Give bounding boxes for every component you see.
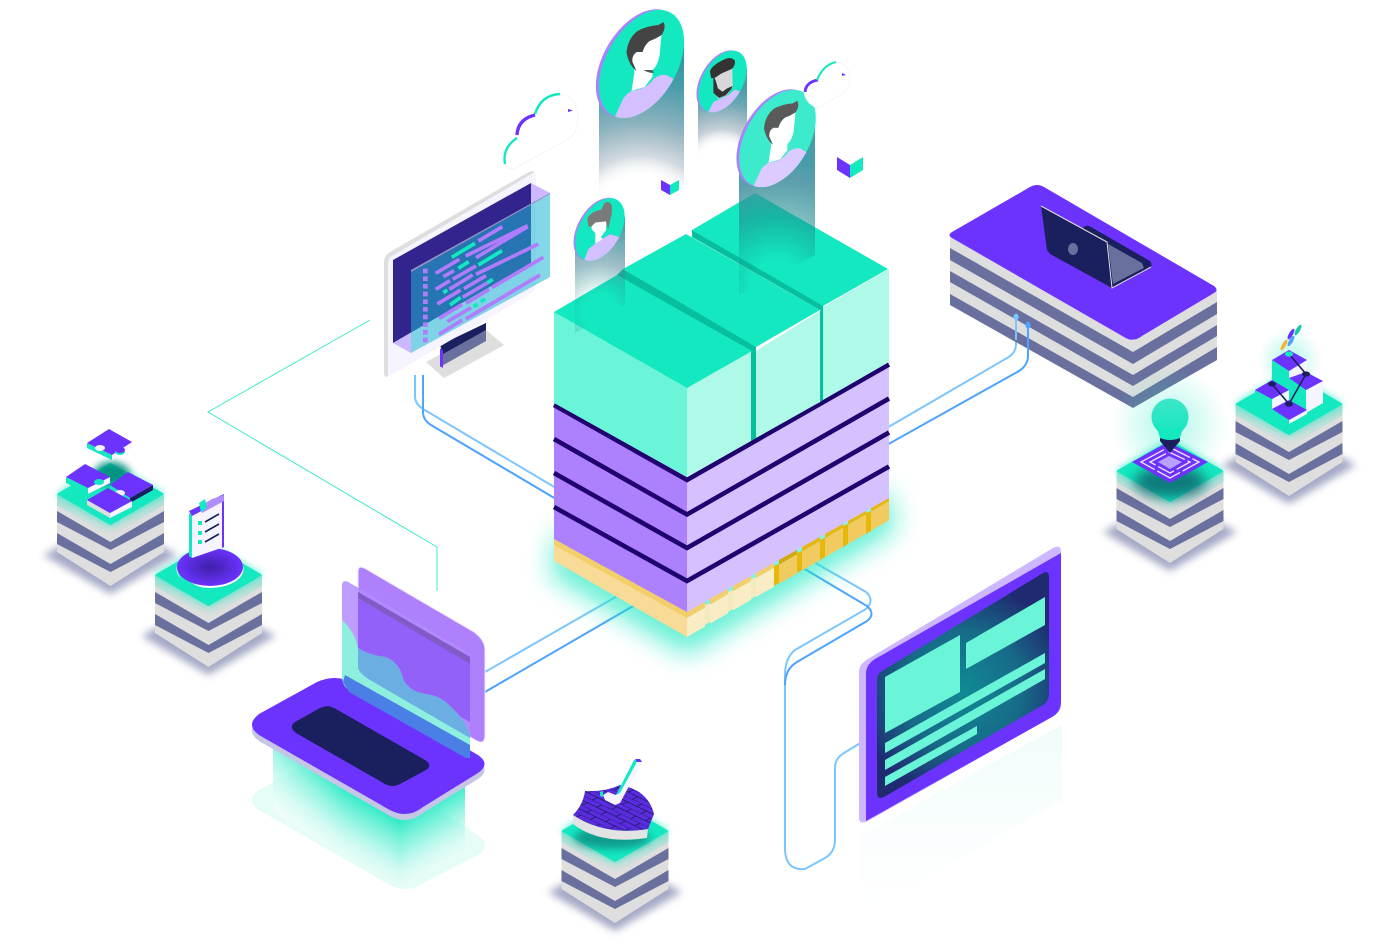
front piece xyxy=(87,488,132,518)
small cube right xyxy=(837,157,863,178)
coloured leaves xyxy=(1279,324,1303,351)
light bulb xyxy=(1152,398,1188,453)
teal light column xyxy=(273,735,465,885)
laptop bottom left xyxy=(252,567,485,889)
thin teal connector line xyxy=(208,320,437,591)
storage platform top right xyxy=(950,185,1217,408)
bulb glow xyxy=(1112,367,1228,483)
front translucent panel xyxy=(342,581,470,758)
tablet content blocks xyxy=(885,597,1045,786)
yellow pallet blocks xyxy=(687,495,889,637)
left piece xyxy=(66,464,110,494)
blue cable: central block to tablet xyxy=(785,561,872,869)
laptop floor shadow xyxy=(252,745,485,889)
connector fragments xyxy=(410,708,438,725)
keyboard rim xyxy=(252,684,484,820)
blue cable: central block to laptop xyxy=(485,583,640,692)
person beam 3 xyxy=(739,118,815,295)
monitor xyxy=(384,171,550,378)
monitor frame edge xyxy=(384,171,535,377)
central glow beneath block xyxy=(550,490,895,655)
monitor screen xyxy=(393,183,531,343)
clipboard xyxy=(189,494,224,558)
cube stairs xyxy=(1255,350,1323,424)
tablet body xyxy=(866,553,1061,821)
cable plugs xyxy=(1013,314,1031,352)
cloud left xyxy=(504,94,578,169)
cloud right xyxy=(804,62,850,108)
code lines xyxy=(425,226,543,344)
tablet xyxy=(859,547,1062,915)
green storage boxes xyxy=(554,193,889,477)
person beam 4 xyxy=(575,217,625,333)
stack with clipboard and disk xyxy=(142,494,276,675)
laptop on platform xyxy=(1041,206,1152,288)
circuit board xyxy=(1132,442,1208,498)
puzzle pieces xyxy=(66,429,153,518)
avatar 3 xyxy=(736,89,816,188)
disk xyxy=(176,548,244,588)
blue cable: central block to storage platform xyxy=(885,317,1028,446)
stack with light bulb xyxy=(1103,367,1237,571)
back box xyxy=(692,193,889,403)
avatar 1 xyxy=(596,9,684,118)
purple layers xyxy=(554,362,889,612)
avatar 4 with hair bun xyxy=(574,198,625,261)
front box xyxy=(554,275,752,477)
keyboard base xyxy=(252,678,484,814)
translucent holographic panel xyxy=(393,183,550,353)
person beam 1 xyxy=(599,42,684,215)
tablet outer edge xyxy=(859,547,1061,822)
yellow base left face xyxy=(554,539,687,637)
stack with puzzle pieces xyxy=(44,429,178,594)
middle box xyxy=(617,234,820,441)
tablet reflection xyxy=(860,725,1062,915)
avatar 2 with beard xyxy=(696,50,747,112)
monitor frame xyxy=(384,172,536,376)
back translucent panel xyxy=(358,567,485,742)
tablet screen xyxy=(877,572,1049,798)
monitor stand xyxy=(426,323,504,378)
right piece xyxy=(110,472,153,503)
blue cable: monitor to central block xyxy=(415,375,556,499)
shield with check mark xyxy=(573,759,654,849)
central data block xyxy=(554,193,889,637)
floating piece xyxy=(87,429,132,460)
keypad xyxy=(292,706,429,786)
stack with shield xyxy=(548,759,682,931)
person beam 2 xyxy=(698,68,747,183)
stack with cube stairs xyxy=(1222,324,1356,504)
small cube left xyxy=(661,180,679,195)
